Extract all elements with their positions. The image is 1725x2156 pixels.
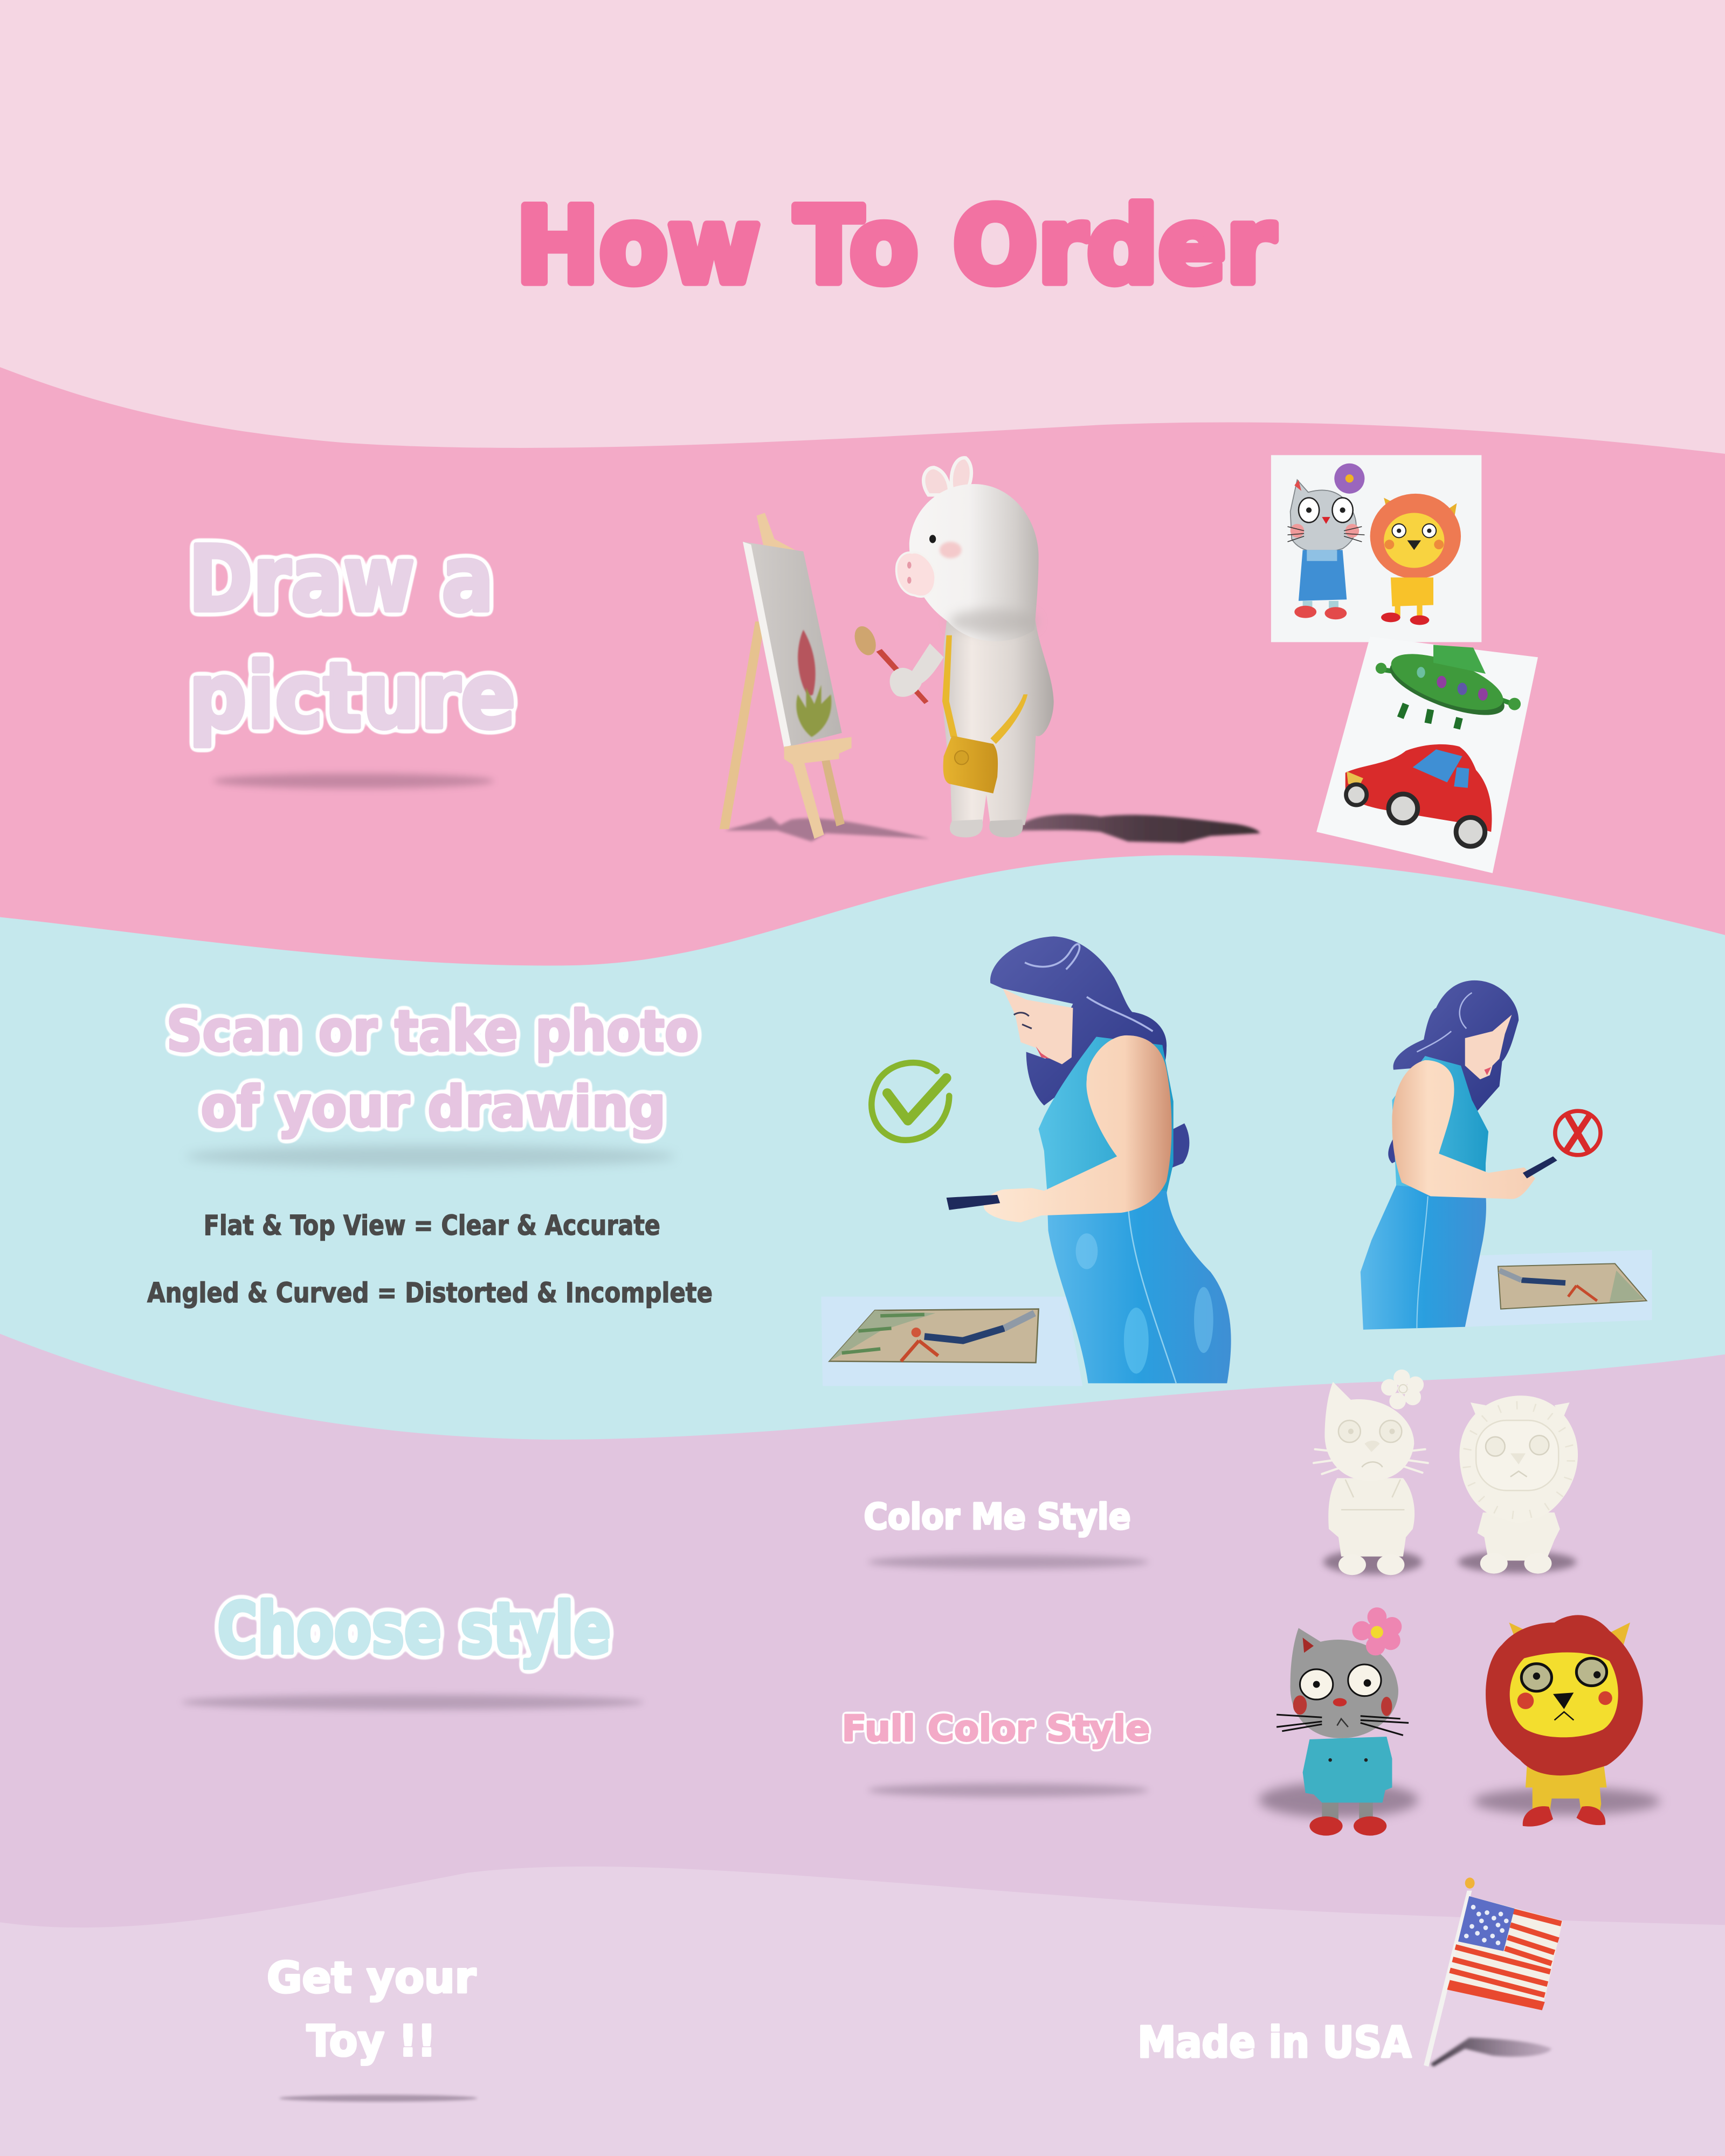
heading: scan or take photo: of your drawing bbox=[201, 1074, 666, 1139]
heading: draw a picture: Draw a bbox=[189, 527, 494, 632]
label: color me style bbox=[864, 1496, 1149, 1569]
heading: draw a picture: picture bbox=[189, 644, 516, 749]
toy: unpainted lion bbox=[1458, 1395, 1578, 1574]
illustration: woman scanning at an angle, incorrect bbox=[1361, 980, 1652, 1330]
text: flat and top view note: Flat & Top View = Clear & Accurate bbox=[204, 1210, 660, 1242]
panel: get your toy band bbox=[0, 1867, 1725, 2156]
heading: scan or take photo bbox=[167, 998, 699, 1167]
label: color me style: Color Me Style bbox=[864, 1496, 1131, 1538]
icon: red x mark bbox=[1555, 1111, 1600, 1155]
label: full color style: Full Color Style bbox=[842, 1708, 1150, 1750]
illustration: woman scanning from above, correct bbox=[821, 936, 1231, 1386]
illustration: children's drawings of ufo and car bbox=[1316, 637, 1538, 873]
title: How To Order bbox=[516, 185, 1275, 307]
toy: painted lion bbox=[1473, 1615, 1660, 1827]
text: made in usa: Made in USA bbox=[1137, 2017, 1411, 2067]
toy: unpainted cat bbox=[1314, 1370, 1428, 1575]
icon: usa flag bbox=[1424, 1877, 1563, 2067]
text: get your toy: Toy !! bbox=[307, 2016, 436, 2066]
text: angled and curved note: Angled & Curved = Distorted & Incomplete bbox=[147, 1277, 713, 1309]
label: full color style bbox=[842, 1708, 1150, 1797]
heading: choose style bbox=[182, 1587, 644, 1710]
heading: scan or take photo: Scan or take photo bbox=[167, 998, 699, 1064]
illustration: easel with canvas bbox=[720, 513, 930, 841]
text: get your toy bbox=[267, 1953, 477, 2102]
illustration: pig painter bbox=[851, 458, 1260, 843]
panel: scan or take photo band bbox=[0, 855, 1725, 2156]
heading: choose style: Choose style bbox=[217, 1587, 611, 1669]
icon: green check mark bbox=[872, 1063, 949, 1140]
panel: choose style band bbox=[0, 1333, 1725, 2156]
toy: painted cat bbox=[1259, 1607, 1418, 1836]
text: get your toy: Get your bbox=[267, 1953, 476, 2002]
heading: draw a picture bbox=[189, 527, 516, 789]
illustration: children's drawings of cat and lion bbox=[1271, 455, 1481, 642]
